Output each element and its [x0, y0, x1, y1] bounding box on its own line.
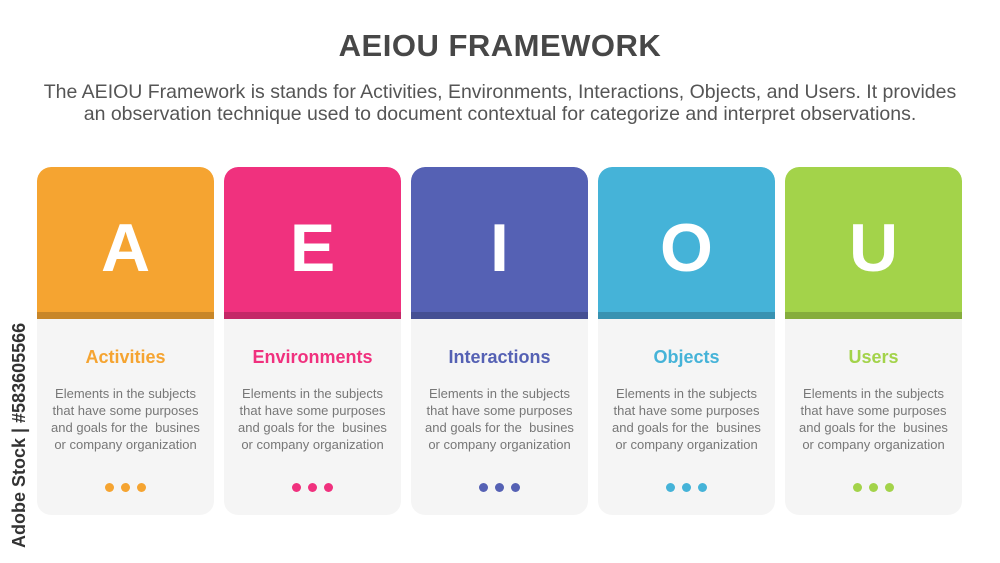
text: environments: or company organization [241, 437, 384, 452]
text: interactions: that have some purposes [426, 403, 572, 418]
text: objects: and goals for the busines [612, 420, 761, 435]
text: objects: Elements in the subjects [616, 386, 757, 401]
heading: activities: Activities [85, 347, 166, 367]
text: interactions: Elements in the subjects [429, 386, 570, 401]
text: objects [612, 386, 761, 452]
panel: objects: O [660, 210, 713, 286]
text: users: that have some purposes [800, 403, 946, 418]
text: activities: or company organization [54, 437, 197, 452]
dots [105, 483, 146, 492]
panel: users: U [849, 210, 898, 286]
panel: interactions [411, 167, 588, 515]
text: users: and goals for the busines [799, 420, 948, 435]
heading: users: Users [848, 347, 899, 367]
watermark: Adobe Stock | #583605566 [9, 323, 29, 548]
text: objects: that have some purposes [614, 403, 759, 418]
panel: objects [598, 167, 775, 515]
text: users: or company organization [802, 437, 945, 452]
heading: objects: Objects [653, 347, 720, 367]
text: environments [238, 386, 387, 452]
panel: interactions: I [490, 210, 509, 286]
text: users [799, 386, 948, 452]
heading: environments: Environments [252, 347, 373, 367]
text: activities: and goals for the busines [51, 420, 200, 435]
panel: users [785, 167, 962, 515]
text: activities: Elements in the subjects [55, 386, 196, 401]
title: AEIOU FRAMEWORK [339, 28, 661, 63]
dots [853, 483, 894, 492]
subtitle: an observation technique used to document contextual for categorize and interpret observations. [84, 103, 916, 125]
panel: environments [224, 167, 401, 515]
text: interactions: or company organization [428, 437, 571, 452]
subtitle: The AEIOU Framework is stands for Activities, Environments, Interactions, Objects, and Users. It provides [44, 81, 956, 103]
text: interactions: and goals for the busines [425, 420, 574, 435]
dots [292, 483, 333, 492]
panel: activities [37, 167, 214, 515]
text: activities: that have some purposes [52, 403, 198, 418]
subtitle [44, 81, 956, 125]
text: environments: and goals for the busines [238, 420, 387, 435]
dots [666, 483, 707, 492]
panel: environments: E [290, 210, 335, 286]
text: interactions [425, 386, 574, 452]
text: objects: or company organization [615, 437, 758, 452]
text: environments: Elements in the subjects [242, 386, 383, 401]
text: activities [51, 386, 200, 452]
text: users: Elements in the subjects [803, 386, 944, 401]
text: environments: that have some purposes [240, 403, 385, 418]
dots [479, 483, 520, 492]
heading: interactions: Interactions [448, 347, 551, 367]
panel: activities: A [101, 210, 150, 286]
